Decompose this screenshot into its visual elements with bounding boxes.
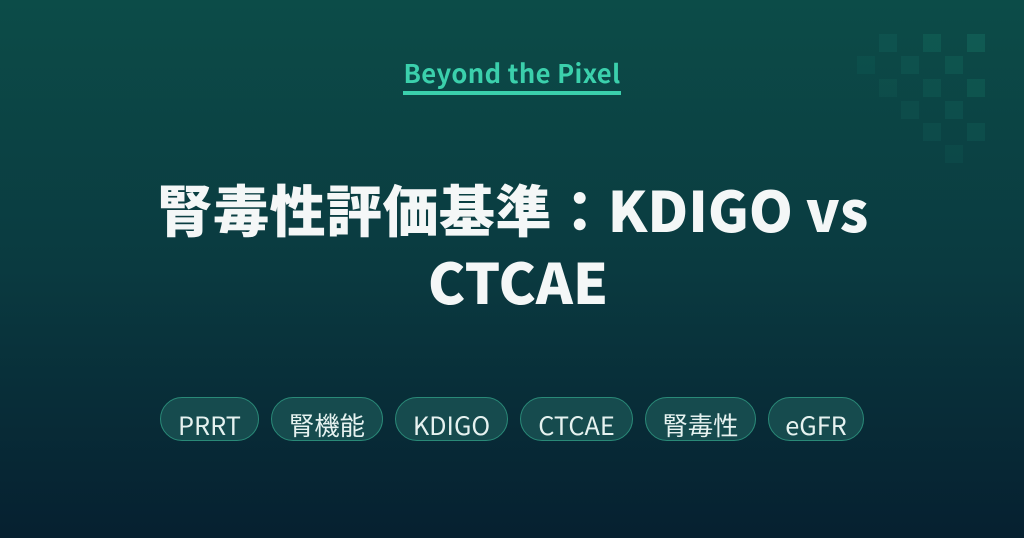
tag: KDIGO [395,397,508,441]
tag: 腎毒性 [645,397,756,441]
tag: 腎機能 [271,397,383,441]
decorative pixel grid [879,34,985,141]
tag: CTCAE: CTCAE [538,407,615,443]
title [157,168,868,321]
tag: 腎毒性: 腎毒性 [663,407,738,443]
tag list [160,397,864,443]
tag: PRRT: PRRT [178,407,241,443]
brand label: Beyond the Pixel: Beyond the Pixel [403,54,621,91]
tag: eGFR: eGFR [785,407,847,443]
tag: KDIGO: KDIGO [413,407,490,443]
title: CTCAE [428,240,608,321]
tag: PRRT [160,397,259,441]
title: 腎毒性評価基準：KDIGO vs [157,168,868,249]
tag: eGFR [768,397,864,441]
tag: 腎機能: 腎機能 [289,407,365,443]
tag: CTCAE [520,397,633,441]
